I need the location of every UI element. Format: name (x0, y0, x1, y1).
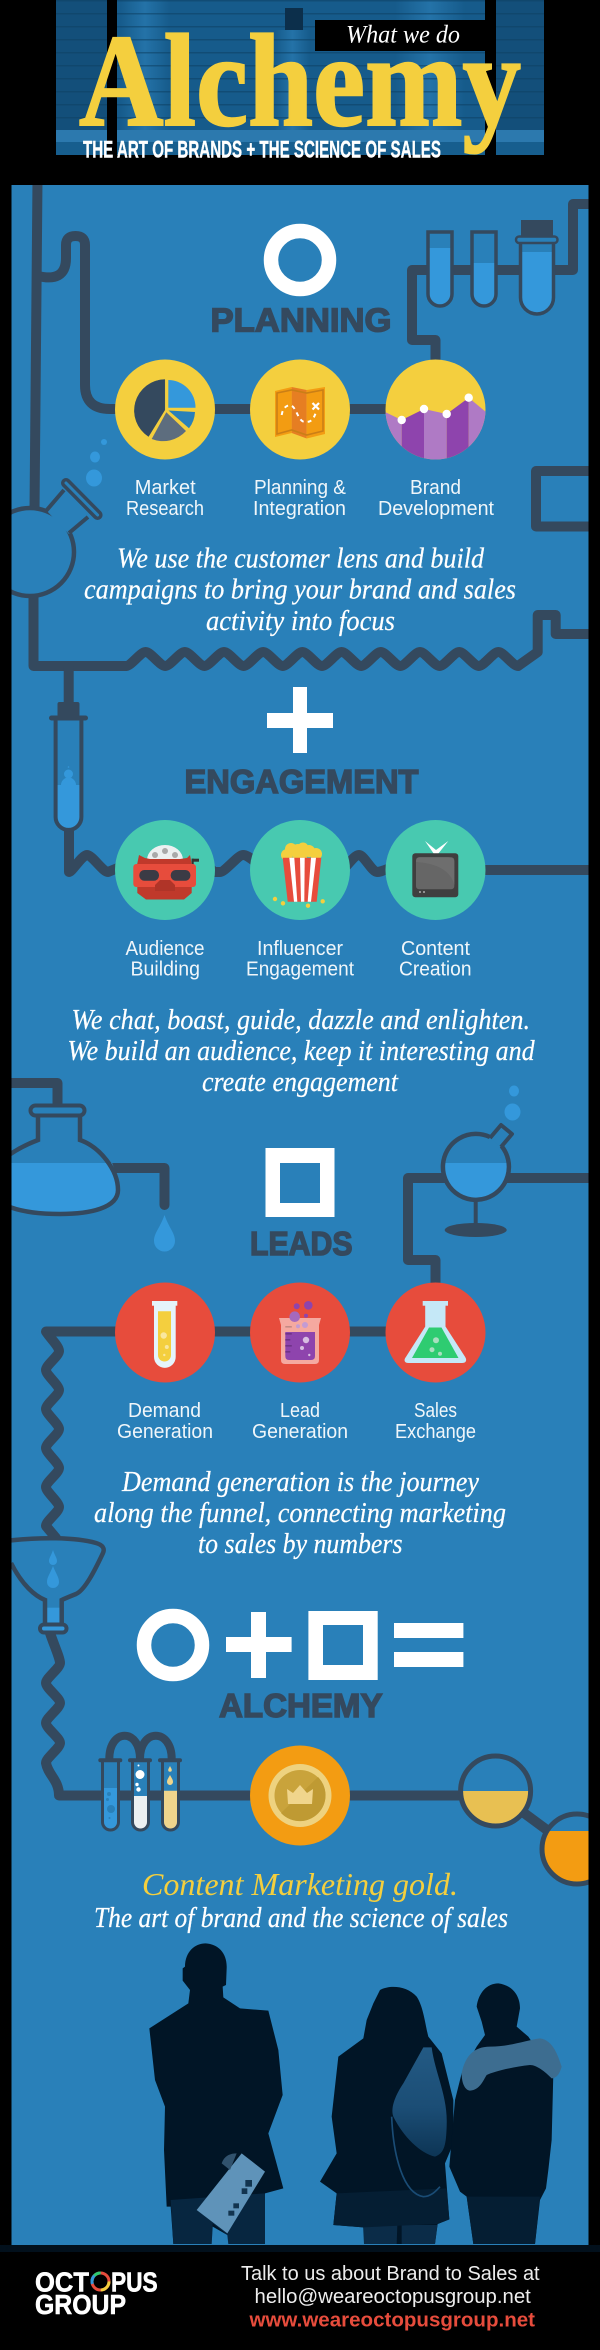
pipe: leads row and coil (41, 1326, 386, 1536)
contact text: hello@weareoctopusgroup.net (254, 2286, 531, 2308)
label: sales exchange (395, 1400, 476, 1443)
text: leads description: to sales by numbers (198, 1529, 403, 1560)
section: leads (94, 1148, 506, 1560)
logo: octopus group: PUS (111, 2266, 158, 2298)
icon: demand generation test tube (115, 1282, 215, 1382)
pipe: left vertical to flask (34, 180, 38, 510)
icon: planning round-bottom flask (0, 439, 107, 596)
label: demand generation (117, 1400, 213, 1443)
label: planning and integration: Planning & (254, 477, 347, 499)
pipe: right box (536, 471, 595, 526)
pipe: alchemy coil and row (46, 1633, 470, 1796)
logo: octopus group (35, 2266, 158, 2320)
label: influencer engagement: Engagement (246, 958, 354, 980)
silhouette: man with leaflet (149, 1943, 283, 2244)
label: influencer engagement (246, 938, 354, 980)
pipe: leads right riser (408, 1178, 600, 1290)
pipe: top left into planning row (38, 236, 435, 409)
icon: three test tubes top right (428, 220, 558, 314)
label: demand generation: Generation (117, 1421, 213, 1443)
text: planning description (84, 544, 516, 637)
text: planning description: We use the customer lens and build (117, 544, 485, 575)
pipe: wavy coil under planning (34, 597, 595, 666)
footer ground strip (0, 2245, 600, 2252)
label: sales exchange: Exchange (395, 1421, 476, 1443)
heading: engagement: ENGAGEMENT (184, 764, 419, 801)
icon: brand development chart (385, 360, 486, 460)
label: lead generation: Lead (280, 1400, 320, 1422)
label: planning and integration (253, 477, 347, 520)
label: influencer engagement: Influencer (257, 938, 343, 960)
text: art of brand and science of sales: The art of brand and the science of sales (94, 1903, 508, 1934)
symbol: plus (267, 687, 333, 753)
plumbing and lab glassware (0, 180, 600, 1884)
label: market research: Research (126, 498, 204, 520)
label: lead generation: Generation (252, 1421, 348, 1443)
icon: vertical test tube engagement (49, 702, 88, 830)
icon: lead generation beaker (250, 1282, 350, 1382)
silhouette: woman in fur hood (449, 1983, 562, 2244)
icon: planning map (250, 360, 350, 460)
label: audience building: Audience (126, 938, 204, 960)
pipe: down to vertical test tube (64, 671, 74, 702)
text: content marketing gold: Content Marketing gold. (142, 1866, 458, 1902)
text: engagement description (67, 1005, 536, 1098)
label: market research: Market (135, 477, 196, 499)
what we do label (315, 20, 485, 51)
what we do label: What we do (346, 22, 460, 49)
text: engagement description: We chat, boast, guide, dazzle and enlighten. (72, 1005, 530, 1036)
icon: connected test tubes (98, 1736, 182, 1830)
text: planning description: activity into focus (206, 606, 395, 637)
symbol: equation circle plus square equals (144, 1611, 463, 1680)
text: leads description (94, 1467, 506, 1560)
silhouette: woman with bag (320, 1987, 453, 2244)
text: leads description: Demand generation is the journey (121, 1467, 480, 1498)
text: engagement description: We build an audience, keep it interesting and (67, 1036, 536, 1067)
symbol: square (266, 1148, 334, 1217)
contact text (241, 2263, 540, 2332)
icon: erlenmeyer flask with pipe and drop (5, 1083, 175, 1251)
label: demand generation: Demand (128, 1400, 201, 1422)
heading: planning: PLANNING (210, 302, 392, 340)
section: engagement (67, 687, 536, 1098)
pipe: engagement row waves (69, 830, 595, 872)
logo: octopus group: GROUP (35, 2289, 126, 2320)
label: market research (126, 477, 204, 520)
section: alchemy equation (94, 1611, 508, 1934)
label: content creation: Creation (399, 958, 472, 980)
footer (0, 2245, 600, 2332)
header banner (56, 0, 544, 164)
symbol: circle (271, 231, 329, 289)
label: audience building: Building (130, 958, 200, 980)
heading: alchemy: ALCHEMY (219, 1688, 382, 1725)
icon: funnel (5, 1538, 104, 1632)
logo: octopus group: OCT (35, 2266, 89, 2298)
title Alchemy: Alchemy (79, 7, 521, 154)
icon: gold coin (250, 1746, 350, 1846)
contact text: www.weareoctopusgroup.net (248, 2310, 535, 2332)
section: planning (84, 231, 516, 637)
heading: leads: LEADS (250, 1226, 352, 1263)
label: sales exchange: Sales (414, 1400, 457, 1422)
pipe: right riser through test tubes (412, 204, 595, 362)
label: content creation (399, 938, 472, 980)
icon: gold flasks at right (461, 1756, 600, 1884)
label: planning and integration: Integration (253, 498, 346, 520)
text: engagement description: create engagement (202, 1067, 399, 1098)
icon: market research pie (115, 360, 215, 460)
label: lead generation (252, 1400, 348, 1443)
header photo background (56, 0, 544, 155)
icon: sales exchange flask (386, 1282, 486, 1382)
icon: round flask on stand (443, 1086, 520, 1237)
label: audience building (126, 938, 204, 980)
contact text: Talk to us about Brand to Sales at (241, 2263, 540, 2285)
label: brand development: Development (378, 498, 494, 520)
icon: influencer popcorn (250, 820, 350, 920)
text: planning description: campaigns to bring your brand and sales (84, 575, 516, 606)
label: content creation: Content (401, 938, 470, 960)
label: brand development (378, 477, 494, 520)
people silhouettes (149, 1943, 562, 2244)
icon: content creation television (386, 820, 486, 920)
text: leads description: along the funnel, connecting marketing (94, 1498, 506, 1529)
label: brand development: Brand (410, 477, 461, 499)
icon: audience building viewer (115, 820, 215, 920)
